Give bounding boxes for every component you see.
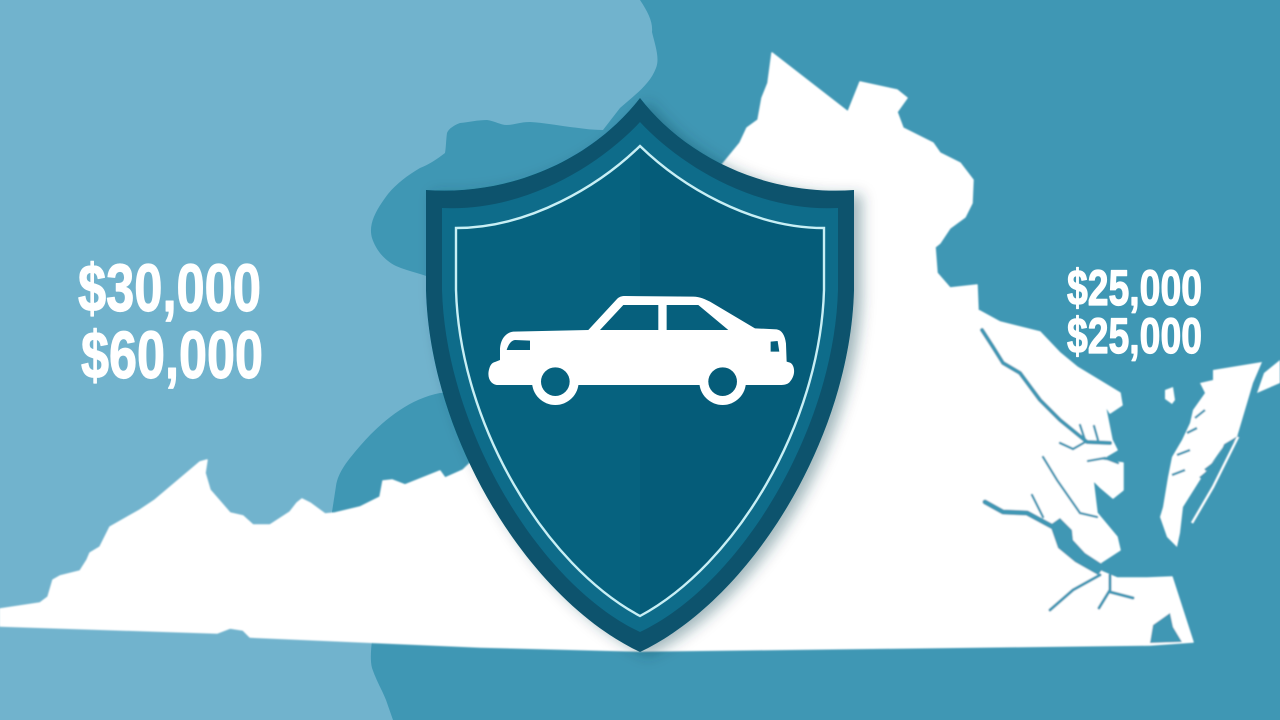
Back Bay [1150, 613, 1182, 643]
state silhouette [0, 53, 1193, 651]
shield face left half [456, 146, 640, 616]
Eastern Shore peninsula [1160, 362, 1262, 547]
rear wheel [699, 358, 746, 405]
front wheel [532, 358, 579, 405]
background: light blue region [0, 0, 657, 720]
Rappahannock and tributaries [1032, 425, 1118, 517]
car lights [507, 340, 779, 352]
shield white inline [456, 146, 824, 616]
text: right coverage amounts [1067, 260, 1202, 364]
text: left coverage amounts: $60,000 [81, 318, 263, 393]
car windows [600, 305, 728, 330]
Norfolk inlets [1050, 575, 1133, 610]
icon: car [488, 296, 794, 405]
Eastern Shore inlets [1172, 410, 1240, 478]
James river [985, 502, 1053, 527]
Maryland land fragment [1257, 360, 1280, 393]
text: right coverage amounts: $25,000 [1067, 308, 1202, 364]
text: left coverage amounts [78, 251, 263, 393]
Potomac river [982, 330, 1110, 443]
Tangier island [1165, 387, 1175, 404]
shield outer edge [426, 98, 854, 652]
shield with car [426, 98, 854, 652]
barrier island [1192, 437, 1238, 523]
shield middle band [442, 122, 838, 632]
shield face right half [640, 146, 824, 616]
text: right coverage amounts: $25,000 [1067, 260, 1202, 316]
text: left coverage amounts: $30,000 [78, 251, 261, 326]
